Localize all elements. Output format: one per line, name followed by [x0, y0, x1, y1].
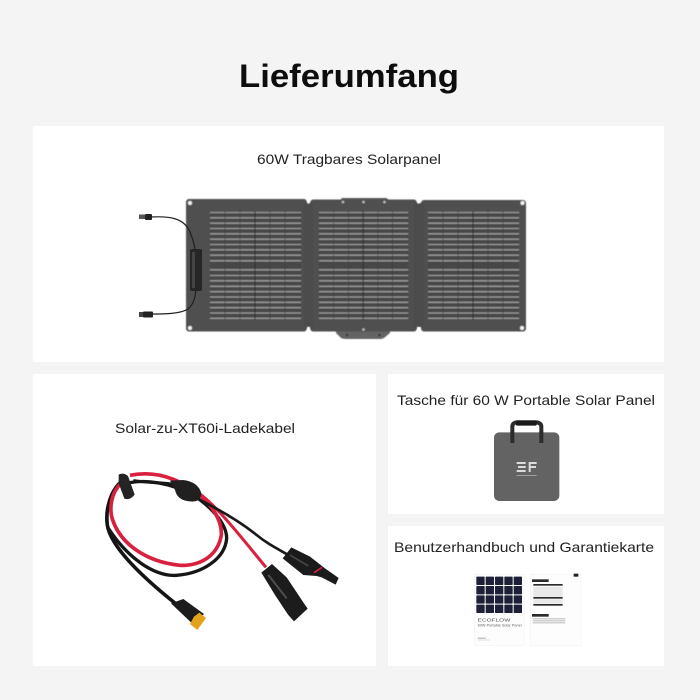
cable illustration: [107, 474, 339, 630]
cable clip: [119, 474, 135, 499]
manual illustration: 60W Portable Solar Panel: [478, 623, 522, 627]
manual cover text: ECOFLOW: [478, 618, 512, 623]
warranty card content: [532, 574, 578, 623]
splitter: [170, 480, 201, 501]
manual solar grid: [476, 577, 522, 613]
panel: manual and warranty card: [388, 526, 664, 666]
title: Lieferumfang: [239, 58, 459, 94]
red connector: [261, 564, 308, 621]
panel: carrying bag: [388, 374, 664, 514]
folding solar blanket: [186, 198, 526, 339]
bag logo: [517, 462, 537, 472]
bag illustration: [494, 420, 559, 501]
panel: solar panel: [33, 126, 664, 362]
XT60 connector: [171, 599, 204, 625]
heading: carrying bag: Tasche für 60 W Portable Solar Panel: [397, 392, 655, 408]
cable with inline box: [139, 214, 202, 318]
heading: charging cable: Solar-zu-XT60i-Ladekabel: [115, 420, 295, 436]
heading: solar panel: 60W Tragbares Solarpanel: [257, 151, 441, 167]
black connector: [283, 547, 339, 585]
panel: charging cable: [33, 374, 376, 666]
manual illustration: [474, 574, 581, 646]
eyelets: [188, 198, 524, 336]
solar cells: [210, 211, 301, 320]
heading: manual: Benutzerhandbuch und Garantiekarte: [394, 539, 654, 555]
